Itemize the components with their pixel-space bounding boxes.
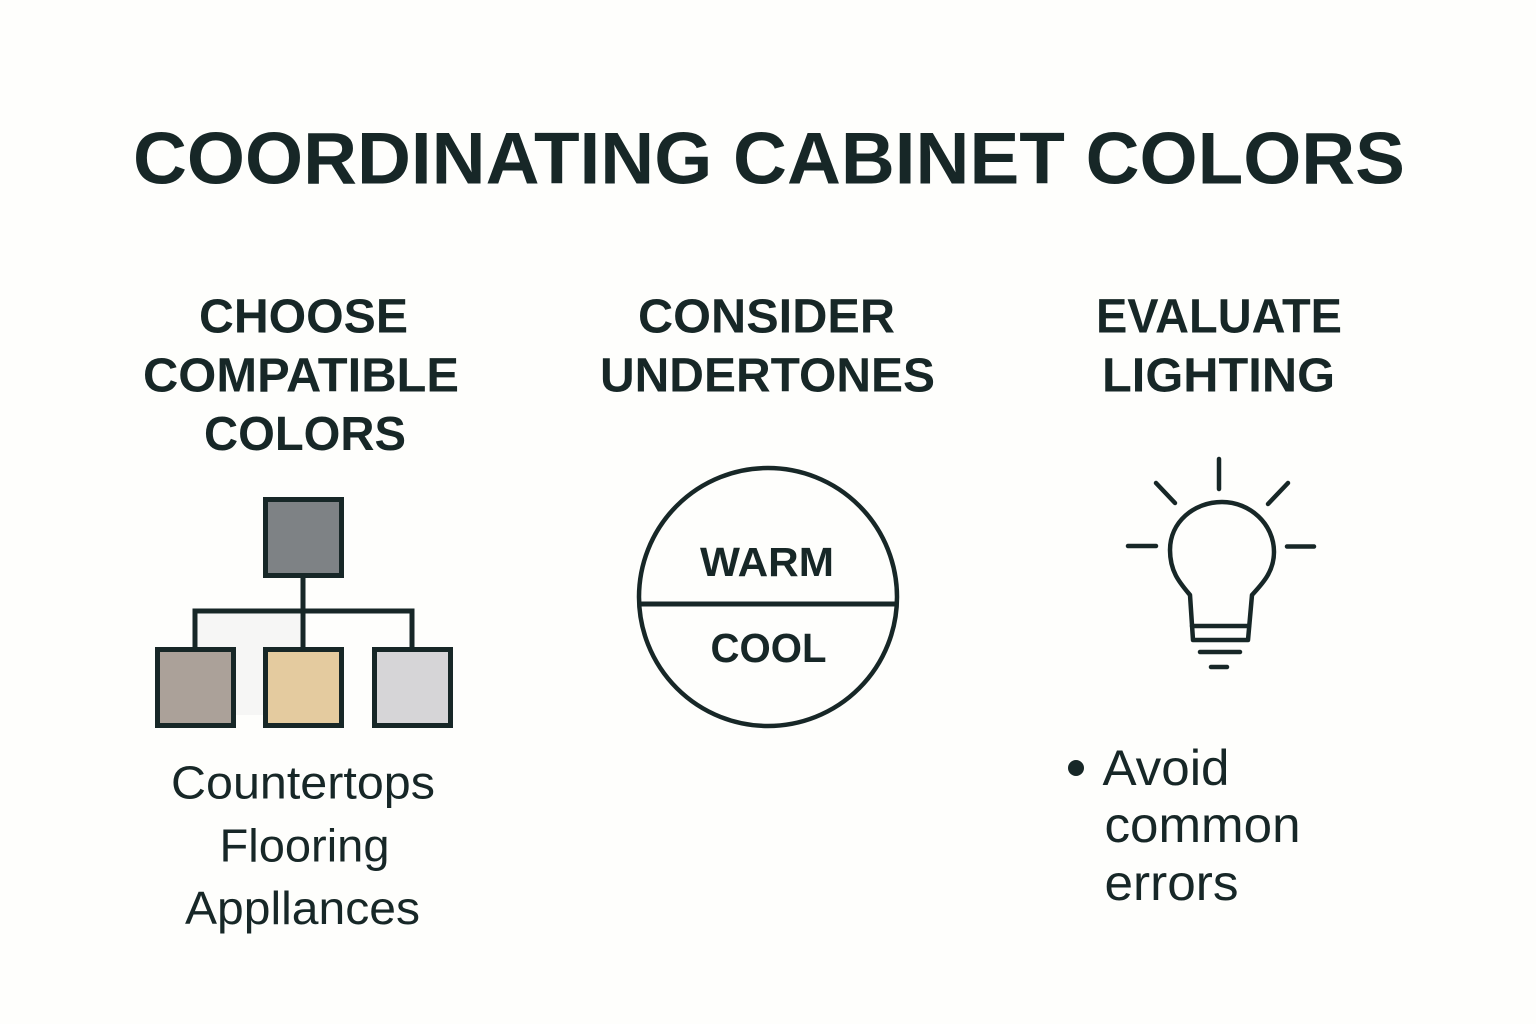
chart: warm and cool circle: COOL <box>710 625 826 671</box>
chart: warm and cool circle <box>639 468 897 726</box>
heading: choose compatible colors: CHOOSE <box>199 290 408 344</box>
text: avoid common errors bullet: common <box>1104 797 1300 853</box>
icon: light bulb <box>1128 459 1314 667</box>
text: avoid common errors bullet: Avoid <box>1102 740 1230 796</box>
text: avoid common errors bullet <box>1068 740 1300 911</box>
panel: choose compatible colors <box>143 290 459 934</box>
panel: evaluate lighting <box>1068 290 1342 911</box>
heading: evaluate lighting <box>1096 290 1342 402</box>
heading: choose compatible colors: COMPATIBLE <box>143 350 459 402</box>
text: coordinating surfaces list: Appllances <box>185 882 420 934</box>
heading: evaluate lighting: EVALUATE <box>1096 290 1342 344</box>
text: avoid common errors bullet: errors <box>1104 855 1238 911</box>
text: coordinating surfaces list: Countertops <box>171 756 435 808</box>
heading: consider undertones <box>600 290 935 402</box>
heading: evaluate lighting: LIGHTING <box>1102 350 1335 402</box>
text: coordinating surfaces list: Flooring <box>220 820 390 872</box>
heading: choose compatible colors: COLORS <box>204 408 406 461</box>
text: coordinating surfaces list <box>171 756 435 934</box>
chart: warm and cool circle: WARM <box>700 539 834 585</box>
chart: color hierarchy swatches <box>158 500 450 726</box>
heading: choose compatible colors <box>143 290 459 461</box>
title: COORDINATING CABINET COLORS <box>133 118 1405 200</box>
panel: consider undertones <box>600 290 935 726</box>
heading: consider undertones: UNDERTONES <box>600 350 935 402</box>
heading: consider undertones: CONSIDER <box>638 290 895 344</box>
